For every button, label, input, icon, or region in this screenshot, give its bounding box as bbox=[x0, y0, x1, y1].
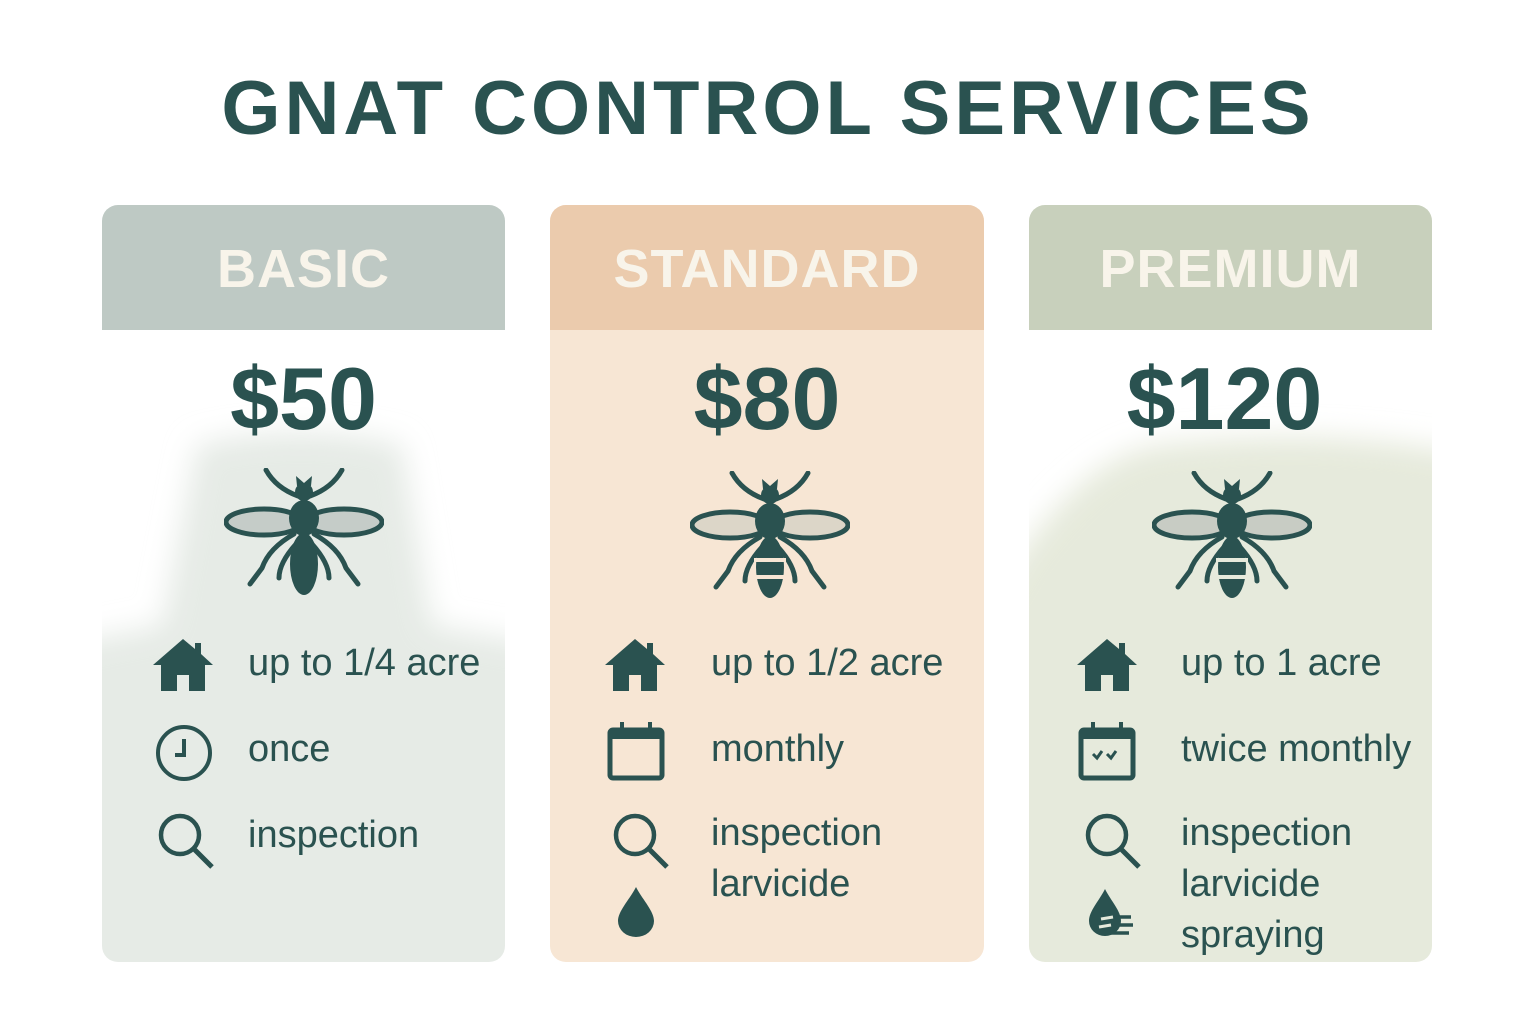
header: basic: BASIC bbox=[217, 239, 390, 299]
text: area: up to 1/4 acre bbox=[248, 642, 480, 684]
panel: basic bbox=[102, 205, 505, 962]
text: frequency: twice monthly bbox=[1181, 728, 1411, 770]
text: services bbox=[711, 812, 882, 905]
icon: clock bbox=[156, 725, 212, 781]
price: premium: $120 bbox=[1127, 349, 1322, 448]
icon: magnifier bbox=[1086, 814, 1141, 869]
icon: drop bbox=[618, 887, 654, 937]
text: frequency: once bbox=[248, 728, 330, 770]
icon: spray drop bbox=[1089, 889, 1133, 936]
panel: premium bbox=[1029, 205, 1432, 962]
header: premium: PREMIUM bbox=[1100, 239, 1362, 299]
text: area: up to 1 acre bbox=[1181, 642, 1382, 684]
header: standard bbox=[550, 205, 984, 330]
icon: mosquito basic bbox=[224, 468, 384, 595]
icon: mosquito premium bbox=[1152, 471, 1312, 598]
icon: magnifier bbox=[614, 814, 669, 869]
text: services: inspection bbox=[1181, 812, 1352, 854]
panel: standard bbox=[550, 205, 984, 962]
icon: house bbox=[153, 639, 213, 691]
text: services: larvicide bbox=[711, 863, 850, 905]
header: standard: STANDARD bbox=[614, 239, 920, 299]
text: service: inspection bbox=[248, 814, 419, 856]
text: services: larvicide bbox=[1181, 863, 1320, 905]
icon: mosquito standard bbox=[690, 471, 850, 598]
text: services bbox=[1181, 812, 1352, 956]
text: area: up to 1/2 acre bbox=[711, 642, 943, 684]
icon: magnifier bbox=[158, 814, 214, 869]
title: GNAT CONTROL SERVICES bbox=[221, 66, 1315, 151]
price: basic: $50 bbox=[230, 349, 377, 448]
text: services: inspection bbox=[711, 812, 882, 854]
icon: house bbox=[605, 639, 665, 691]
text: frequency: monthly bbox=[711, 728, 844, 770]
header: basic bbox=[102, 205, 505, 330]
icon: calendar check bbox=[1078, 722, 1136, 780]
text: services: spraying bbox=[1181, 914, 1325, 956]
price: standard: $80 bbox=[694, 349, 840, 448]
header: premium bbox=[1029, 205, 1432, 330]
icon: house bbox=[1077, 639, 1137, 691]
icon: calendar bbox=[608, 722, 664, 780]
